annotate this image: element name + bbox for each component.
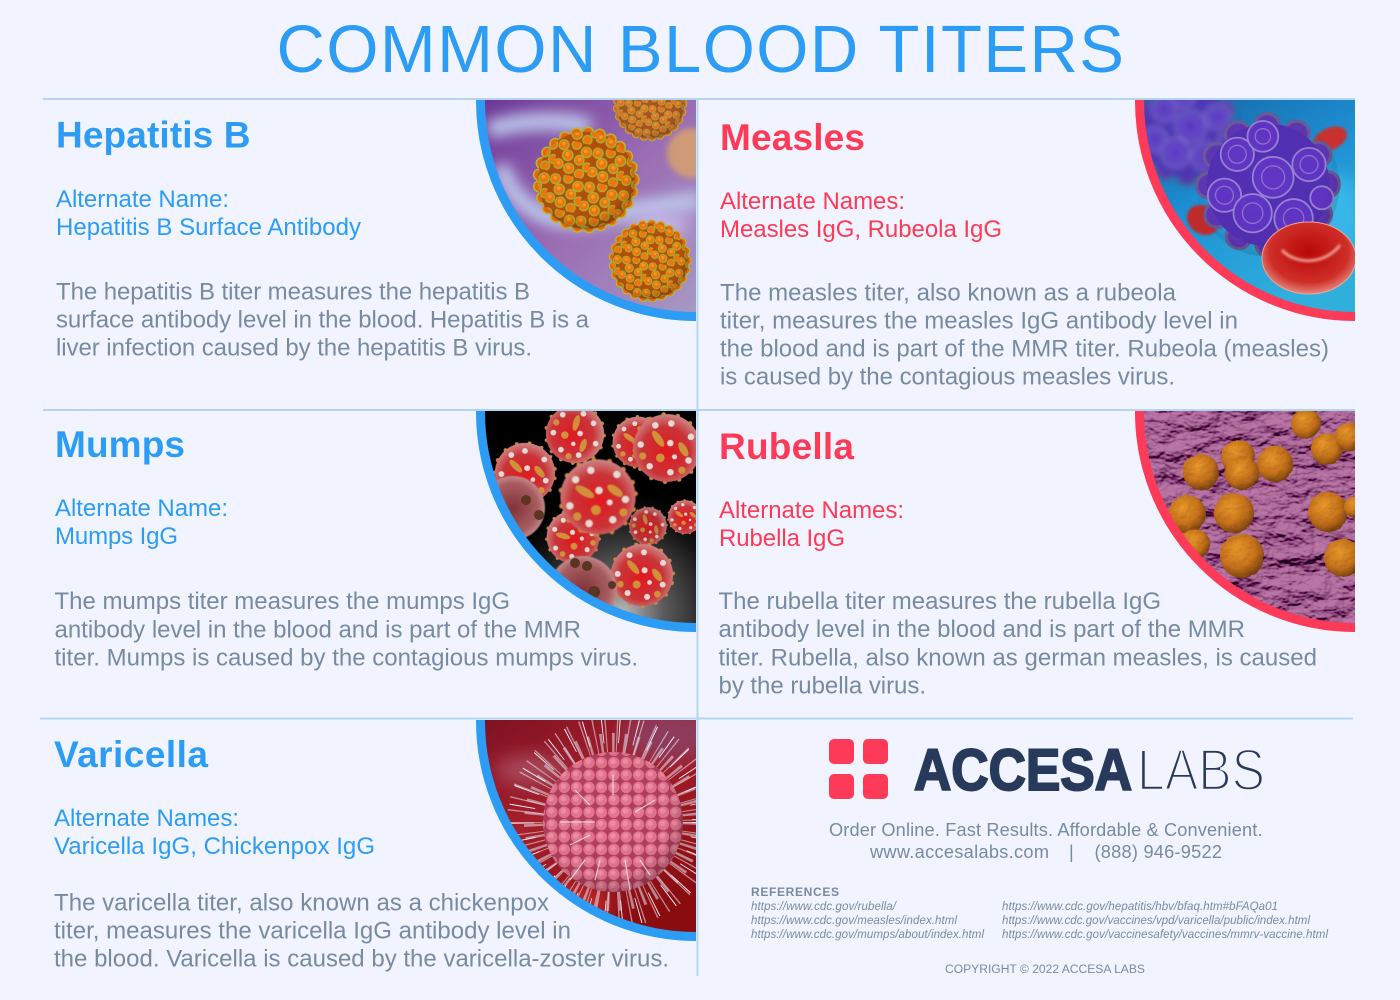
description: Varicella: The varicella titer, also known as a chickenpox <box>54 890 549 916</box>
description: Hepatitis B <box>56 278 590 362</box>
title: COMMON BLOOD TITERS <box>276 12 1124 87</box>
heading: Mumps: Mumps <box>55 424 185 465</box>
references: https://www.cdc.gov/hepatitis/hbv/bfaq.htm#bFAQa01 <box>1002 901 1278 913</box>
references: https://www.cdc.gov/mumps/about/index.html <box>751 929 984 941</box>
tagline and contact: | <box>1069 842 1074 862</box>
image: rubella virus on tissue <box>1135 409 1366 632</box>
description: Rubella: by the rubella virus. <box>718 672 926 700</box>
tagline and contact: Order Online. Fast Results. Affordable & Convenient. <box>829 820 1262 840</box>
image: hepatitis B virus particles <box>476 100 696 321</box>
references: https://www.cdc.gov/rubella/ <box>751 901 898 913</box>
alternate names: Varicella <box>54 805 375 860</box>
heading: Hepatitis B: Hepatitis B <box>56 114 250 156</box>
tagline and contact: (888) 946-9522 <box>1094 842 1222 862</box>
references: https://www.cdc.gov/vaccinesafety/vaccines/mmrv-vaccine.html <box>1002 929 1328 941</box>
panel: Accesa Labs footer <box>751 738 1328 976</box>
alternate name: Hepatitis B: Alternate Name: <box>56 186 229 213</box>
panel: Rubella <box>718 409 1366 700</box>
wordmark: LABS <box>1137 738 1265 803</box>
image: measles virus and red blood cells <box>1135 100 1355 321</box>
tagline and contact <box>829 820 1262 862</box>
alternate names: Rubella: Rubella IgG <box>719 525 845 552</box>
references: https://www.cdc.gov/vaccines/vpd/varicella/public/index.html <box>1002 915 1310 927</box>
heading: Varicella: Varicella <box>54 734 208 775</box>
alternate names: Varicella: Varicella IgG, Chickenpox IgG <box>54 833 375 860</box>
image: varicella virus <box>476 720 696 941</box>
panel: Varicella <box>54 710 715 972</box>
description: Measles: is caused by the contagious measles virus. <box>720 364 1175 390</box>
alternate names: Measles <box>720 188 1002 243</box>
logo: Accesa Labs <box>829 738 1265 803</box>
references: https://www.cdc.gov/measles/index.html <box>751 915 957 927</box>
description: Measles: titer, measures the measles IgG antibody level in <box>720 308 1238 334</box>
panel: Mumps <box>54 397 710 672</box>
wordmark: ACCESA <box>914 738 1132 803</box>
alternate name: Hepatitis B <box>56 186 361 241</box>
description: Rubella: titer. Rubella, also known as german measles, is caused <box>718 644 1317 672</box>
alternate names: Measles: Alternate Names: <box>720 188 905 215</box>
heading: Rubella: Rubella <box>719 426 854 467</box>
description: Rubella: The rubella titer measures the rubella IgG <box>718 588 1161 615</box>
alternate name: Hepatitis B: Hepatitis B Surface Antibody <box>56 214 361 241</box>
icon: four red squares <box>829 739 888 799</box>
description: Mumps: The mumps titer measures the mumps IgG <box>54 588 510 615</box>
description: Mumps: titer. Mumps is caused by the contagious mumps virus. <box>54 644 638 672</box>
panel: Measles <box>720 79 1365 391</box>
alternate name: Mumps: Mumps IgG <box>55 523 178 550</box>
image: mumps virus particles <box>476 411 696 632</box>
references <box>751 885 1328 941</box>
description: Varicella: titer, measures the varicella IgG antibody level in <box>54 918 571 944</box>
alternate names: Measles: Measles IgG, Rubeola IgG <box>720 216 1002 243</box>
heading: Measles: Measles <box>720 117 865 158</box>
alternate names: Varicella: Alternate Names: <box>54 805 239 832</box>
panel: Hepatitis B <box>56 100 696 360</box>
tagline and contact: www.accesalabs.com <box>869 842 1049 862</box>
description: Mumps <box>54 588 638 672</box>
description: Rubella <box>718 588 1317 700</box>
description: Varicella <box>54 890 669 972</box>
description: Hepatitis B: The hepatitis B titer measures the hepatitis B <box>56 278 530 306</box>
references: REFERENCES <box>751 885 839 899</box>
alternate name: Mumps: Alternate Name: <box>55 495 228 522</box>
description: Mumps: antibody level in the blood and is part of the MMR <box>54 616 581 644</box>
description: Hepatitis B: surface antibody level in the blood. Hepatitis B is a <box>56 306 590 334</box>
wordmark <box>914 738 1265 803</box>
alternate names: Rubella <box>719 497 904 552</box>
alternate names: Rubella: Alternate Names: <box>719 497 904 524</box>
copyright: COPYRIGHT © 2022 ACCESA LABS <box>945 962 1145 976</box>
description: Varicella: the blood. Varicella is caused by the varicella-zoster virus. <box>54 946 669 972</box>
description: Rubella: antibody level in the blood and is part of the MMR <box>718 616 1245 643</box>
description: Measles: the blood and is part of the MMR titer. Rubeola (measles) <box>720 336 1329 362</box>
description: Measles <box>720 280 1329 390</box>
description: Measles: The measles titer, also known as a rubeola <box>720 280 1177 306</box>
alternate name: Mumps <box>55 495 228 550</box>
description: Hepatitis B: liver infection caused by the hepatitis B virus. <box>56 334 532 362</box>
